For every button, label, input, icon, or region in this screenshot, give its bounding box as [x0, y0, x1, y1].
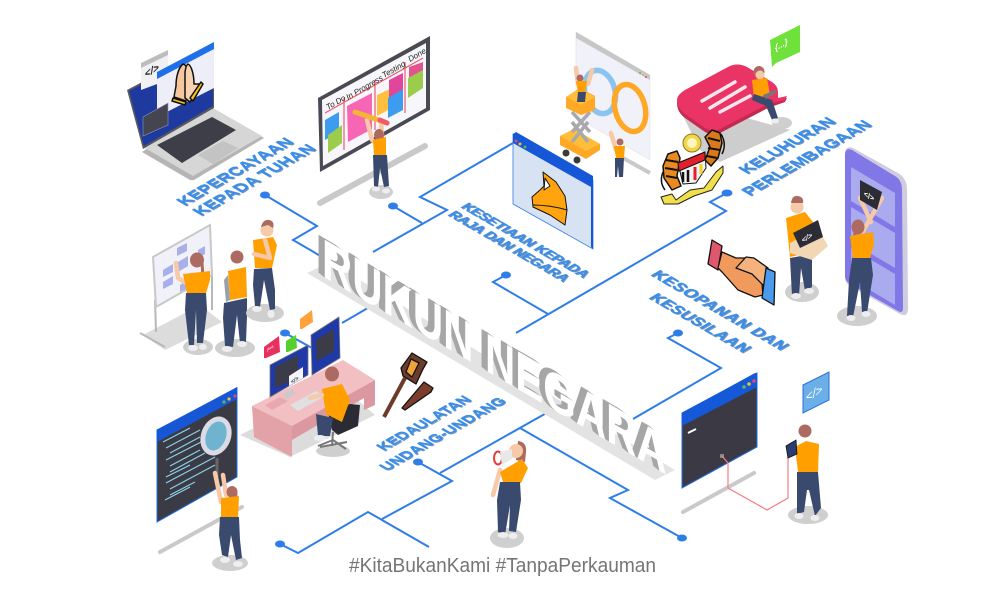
code icon tile: [803, 372, 829, 413]
title: RUKUN NEGARA: RUKUN NEGARA: [322, 226, 667, 487]
title: RUKUN NEGARA: RUKUN NEGARA: [318, 223, 663, 484]
woman pointing: [176, 252, 213, 355]
heading: Kepercayaan Kepada Tuhan: KEPERCAYAAN: [174, 136, 299, 209]
icon: praying hands: [172, 64, 203, 105]
heading: Kesopanan dan Kesusilaan: KESOPANAN DAN: [647, 268, 792, 353]
woman at phone: [846, 180, 882, 321]
magnifier: [195, 412, 237, 478]
language tags: java: [266, 343, 274, 352]
shield: [678, 152, 706, 184]
heading: Kepercayaan Kepada Tuhan: KEPADA TUHAN: [190, 143, 322, 219]
laptop with praying hands window: [127, 42, 264, 180]
dark mini window: [143, 103, 168, 136]
motto ribbon: [661, 166, 723, 204]
infinity loop: [580, 67, 651, 135]
right monitor: [311, 317, 340, 375]
code icon tile: </>: [806, 381, 822, 405]
heading: Keluhuran Perlembagaan: PERLEMBAGAAN: [739, 119, 877, 199]
seated woman: [752, 66, 792, 129]
man with box: [785, 196, 828, 302]
heading: Keluhuran Perlembagaan: KELUHURAN: [736, 116, 842, 177]
heading: Kedaulatan Undang-Undang: KEDAULATAN: [373, 393, 476, 453]
team at whiteboard group: [140, 220, 284, 357]
window with songkok icon: [513, 132, 593, 249]
heading: Kesetiaan Kepada Raja dan Negara: RAJA DAN NEGARA: [444, 208, 574, 284]
heading: Kedaulatan Undang-Undang: KEDAULATAN: [374, 394, 477, 454]
developer desk with monitors: [240, 310, 375, 457]
title: RUKUN NEGARA: RUKUN NEGARA: [316, 221, 660, 482]
kanban board with woman: Done: [406, 46, 428, 64]
woman drawing with pencil: [355, 112, 393, 199]
window: [157, 42, 214, 117]
code lines: [163, 428, 215, 500]
icon: handshake: [708, 240, 775, 305]
desk: [252, 360, 375, 457]
kanban board with woman: In Progress: [344, 73, 384, 102]
pink cable: [722, 456, 788, 510]
left monitor: [270, 345, 308, 399]
flowchart whiteboard: [140, 225, 222, 350]
code window with magnifier and woman: [157, 387, 248, 571]
right tiger: [705, 130, 724, 166]
woman with magnifier: [212, 473, 248, 571]
kanban board with woman: Testing: [380, 59, 408, 80]
language tags: [264, 310, 313, 358]
man with box: </>: [802, 230, 812, 245]
heading: Kepercayaan Kepada Tuhan: KEPERCAYAAN: [173, 135, 298, 208]
connector lines network: [260, 143, 732, 553]
man on lift: [576, 68, 592, 102]
icon: gavel: [384, 353, 433, 417]
heading: Kesopanan dan Kesusilaan: KESUSILAAN: [645, 291, 755, 355]
heading: Kesetiaan Kepada Raja dan Negara: RAJA DAN NEGARA: [445, 209, 575, 285]
whiteboard with infinity loop and scissor lift: [560, 32, 651, 177]
heading: Kesetiaan Kepada Raja dan Negara: KESETIAAN KEPADA: [458, 201, 595, 281]
left tiger: [661, 151, 681, 190]
title: RUKUN NEGARA: RUKUN NEGARA: [321, 225, 666, 486]
heading: Kesopanan dan Kesusilaan: KESOPANAN DAN: [648, 269, 793, 354]
crest: [683, 134, 701, 152]
heading: Kepercayaan Kepada Tuhan: KEPADA TUHAN: [189, 142, 321, 218]
scissor lift: [560, 88, 600, 164]
heading: Kesopanan dan Kesusilaan: KESUSILAAN: [646, 292, 756, 356]
phone with man and woman: [785, 147, 908, 326]
man with tablet: [786, 424, 828, 524]
sticky notes: [325, 62, 423, 153]
small code window: </>: [145, 61, 159, 81]
woman with megaphone: [490, 441, 528, 548]
heading: Kesetiaan Kepada Raja dan Negara: KESETIAAN KEPADA: [457, 200, 594, 280]
green chat bubble: {...}: [775, 36, 788, 53]
left monitor: </>: [291, 376, 299, 386]
megaphone: [494, 449, 512, 465]
title: RUKUN NEGARA: RUKUN NEGARA: [318, 222, 662, 484]
man thinking: [246, 220, 284, 322]
kanban board with woman: [318, 36, 430, 203]
title: RUKUN NEGARA: RUKUN NEGARA: [320, 225, 665, 486]
man with tablet: [215, 250, 255, 357]
speech bubble with seated woman: [677, 25, 800, 162]
seated man: [310, 366, 360, 457]
heading: Kedaulatan Undang-Undang: UNDANG-UNDANG: [377, 396, 512, 474]
kanban board with woman: To Do: [324, 93, 348, 112]
hashtag caption: #KitaBukanKami #TanpaPerkauman: [349, 555, 656, 577]
heading: Keluhuran Perlembagaan: PERLEMBAGAAN: [738, 118, 876, 198]
title: RUKUN NEGARA: RUKUN NEGARA: [319, 224, 664, 485]
man at whiteboard: [611, 133, 625, 177]
terminal window with wire and man: [682, 372, 829, 524]
woman at phone: </>: [864, 189, 874, 204]
title: RUKUN NEGARA: RUKUN NEGARA: [317, 222, 661, 483]
icon: songkok: [532, 172, 567, 225]
heading: Keluhuran Perlembagaan: KELUHURAN: [735, 115, 841, 176]
heading: Kedaulatan Undang-Undang: UNDANG-UNDANG: [376, 395, 511, 473]
Malaysian coat of arms: [661, 130, 724, 204]
